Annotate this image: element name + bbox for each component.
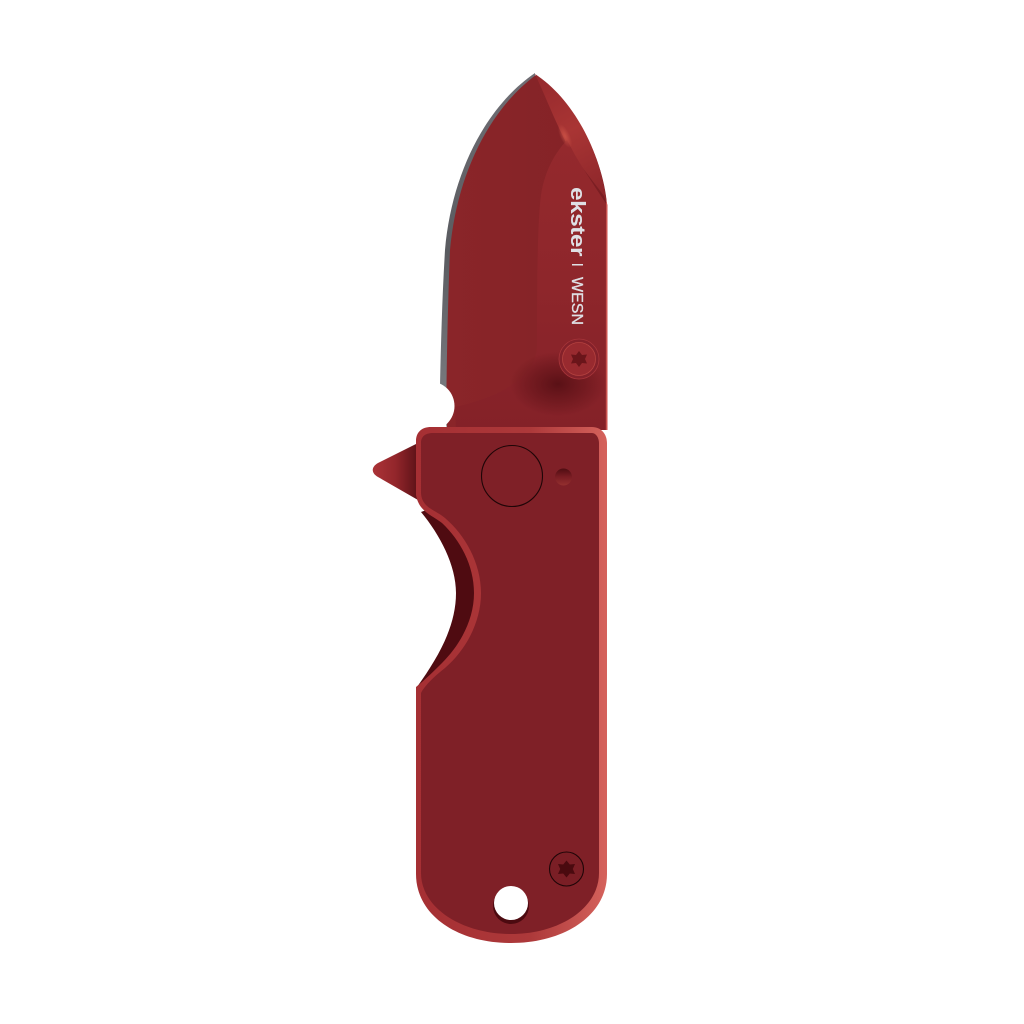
lanyard hole — [493, 886, 529, 924]
knife illustration — [373, 73, 608, 943]
finger guard — [373, 443, 418, 500]
pivot circle — [482, 446, 542, 506]
blade cutting edge — [440, 73, 535, 430]
handle screw — [550, 852, 584, 886]
small detent hole — [555, 468, 572, 486]
blade flat — [446, 75, 607, 430]
blade — [440, 73, 608, 430]
blade upper facet — [535, 74, 607, 205]
facet glint — [555, 122, 575, 150]
shadow around pivot screw — [519, 358, 598, 410]
handle face — [421, 433, 599, 934]
blade pivot screw — [558, 338, 600, 380]
notch at blade base — [406, 382, 454, 430]
finger groove inner scale — [417, 505, 490, 690]
blade fuller — [455, 140, 607, 430]
blade spine highlight — [606, 200, 608, 430]
handle — [416, 427, 607, 943]
logo text: ekster: ekster — [566, 187, 588, 257]
logo text: WESN: WESN — [568, 277, 585, 325]
logo separator — [572, 264, 583, 266]
handle bevel — [416, 427, 607, 943]
